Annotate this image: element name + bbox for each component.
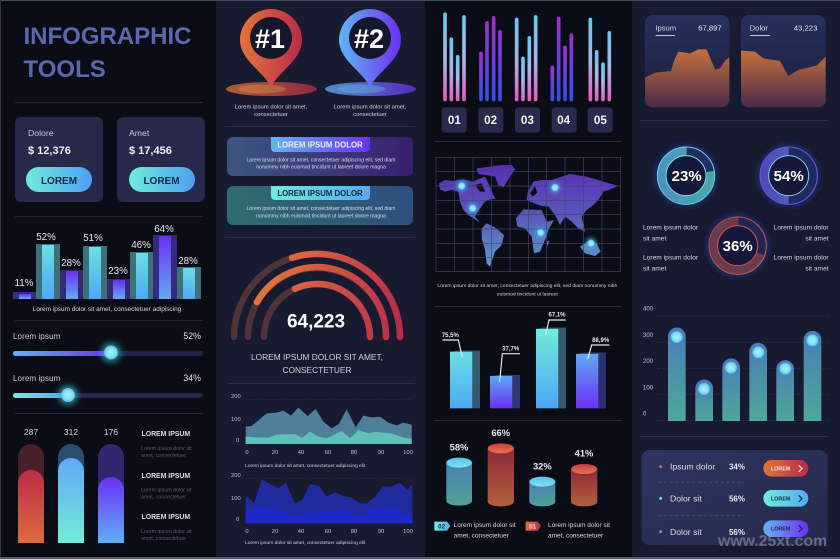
pill bars legend <box>141 431 192 542</box>
area chart: blue: 200 <box>231 473 241 479</box>
panel: Dolore card <box>15 117 103 202</box>
panel: lorem ipsum dolor box 2: nonummy nibh euismod tincidunt ut laoreet dolore magna <box>256 214 386 220</box>
row: Dolor sit 1: Dolor sit <box>670 494 702 504</box>
row: Dolor sit 2 <box>659 520 808 537</box>
pin #1 caption <box>235 104 308 118</box>
thin bar groups 01-05 <box>443 12 611 101</box>
panel: status list <box>642 450 828 545</box>
cylinder legend: 02 <box>438 523 446 530</box>
blue chart caption: Lorem ipsum dolor sit amet, consectetuer adipiscing elit <box>245 540 366 546</box>
area chart: blue: 60 <box>325 529 331 535</box>
3D bar chart: 75,5% <box>442 333 459 339</box>
panel: lorem ipsum dolor box 1 <box>227 137 413 176</box>
gauge caption: CONSECTETUER <box>282 365 352 375</box>
panel: lorem ipsum dolor box 2 <box>227 186 413 225</box>
bar chart: rounded bars with knobs: 400 <box>643 307 654 313</box>
column 3 drawn in zoomed coordinates <box>436 12 621 297</box>
number tiles 01-05: 02 <box>484 114 498 127</box>
cylinder legend: Lorem ipsum dolor sit <box>548 522 610 529</box>
donut: 54% <box>757 144 821 208</box>
cylinder chart: 66% <box>491 428 511 438</box>
pin #1 caption: consectetuer <box>254 112 288 118</box>
panel: Amet card <box>117 117 205 202</box>
bar chart: percentages <box>13 224 201 299</box>
area chart: teal <box>231 394 413 456</box>
cylinder chart: 58% <box>450 442 469 452</box>
watermark: www.25xt.com <box>717 533 827 550</box>
area chart: blue: 20 <box>272 529 278 535</box>
bar chart: percentages: 46% <box>131 240 151 251</box>
title: TOOLS <box>24 56 106 83</box>
panel: lorem ipsum dolor box 1: nonummy nibh euismod tincidunt ut laoreet dolore magna <box>256 164 386 170</box>
row: Ipsum dolor: 34% <box>729 463 745 472</box>
area chart: teal: 100 <box>403 450 413 456</box>
donut labels left: Lorem ipsum dolor <box>643 225 699 232</box>
panel: Ipsum area card <box>645 15 729 107</box>
panel: Dolore card: Dolore <box>28 128 54 138</box>
slider: 52%: 52% <box>183 331 201 341</box>
slider: 52%: Lorem ipsum <box>13 332 61 341</box>
cylinder chart: 41% <box>575 449 594 459</box>
row: Ipsum dolor: LOREM <box>771 466 791 472</box>
area chart: teal: 100 <box>231 417 241 423</box>
donut labels right: Lorem ipsum dolor <box>774 255 829 262</box>
donut: 36%: 36% <box>723 238 753 255</box>
map caption <box>437 283 617 297</box>
bar chart: percentages: 64% <box>154 224 174 235</box>
pill bars legend: amet, consectetuer <box>141 536 186 542</box>
title <box>24 23 192 83</box>
row: Ipsum dolor: Ipsum dolor <box>670 462 715 472</box>
bar chart: rounded bars with knobs: 100 <box>643 385 654 391</box>
bar chart: rounded bars with knobs <box>643 307 830 421</box>
pill bars legend: LOREM IPSUM <box>142 514 190 521</box>
area chart: blue: 40 <box>298 529 304 535</box>
row: Dolor sit 1 <box>659 490 808 507</box>
donut: 36% <box>706 214 770 278</box>
donut: 23%: 23% <box>672 168 702 185</box>
panel: Dolore card: $ 12,376 <box>28 145 71 157</box>
bar chart: percentages: 23% <box>108 266 128 277</box>
area chart: teal: 0 <box>245 450 249 456</box>
3D bar chart: 88,9% <box>592 338 610 344</box>
pill bars legend: amet, consectetuer <box>141 494 186 500</box>
donut: 54%: 54% <box>774 168 804 185</box>
panel: lorem ipsum dolor box 2: Lorem ipsum dolor sit amet, consectetuer adipiscing elit, sed diam <box>247 206 395 212</box>
cylinder legend: amet, consectetuer <box>454 533 510 540</box>
donut labels left: Lorem ipsum dolor <box>643 255 699 262</box>
slider: 52% <box>13 331 203 362</box>
area chart: teal: 60 <box>325 450 331 456</box>
bar chart: percentages: 51% <box>83 233 103 244</box>
3D bar chart <box>442 313 610 408</box>
gauge caption <box>251 352 383 375</box>
pin #2 caption: Lorem ipsum dolor sit amet, <box>334 104 407 110</box>
pin #2 caption <box>334 104 407 118</box>
pill bars legend: LOREM IPSUM <box>142 473 190 480</box>
pill bars: 287 312 176: 312 <box>64 427 78 437</box>
area chart: blue <box>231 473 413 535</box>
pill bars legend: Lorem ipsum dolor sit <box>141 529 192 535</box>
pill bars: 287 312 176: 176 <box>104 427 118 437</box>
pill bars legend: Lorem ipsum dolor sit <box>141 446 192 452</box>
donut labels right <box>774 225 829 273</box>
icon: map pin #1: #1 <box>255 24 285 54</box>
area chart: blue: 100 <box>403 529 413 535</box>
panel: Amet card: LOREM <box>143 176 180 187</box>
panel: Dolor area card <box>741 15 826 107</box>
cylinder chart: 32% <box>533 461 552 471</box>
row: Ipsum dolor <box>659 460 808 477</box>
3D bar chart: 67,1% <box>549 313 566 319</box>
pill bars legend: Lorem ipsum dolor sit <box>141 488 192 494</box>
bar chart: percentages: 28% <box>61 258 81 269</box>
panel: Dolor area card: 43,223 <box>794 24 817 33</box>
row: Dolor sit 1: LOREM <box>771 496 791 502</box>
area chart: blue: 90 <box>378 529 384 535</box>
cylinder legend: 01 <box>529 523 537 530</box>
number tiles 01-05: 04 <box>557 114 571 127</box>
area chart: teal: 20 <box>272 450 278 456</box>
pin #2 caption: consectetuer <box>353 112 387 118</box>
area chart: teal: 40 <box>298 450 304 456</box>
area chart: blue: 0 <box>245 529 249 535</box>
donut: 23% <box>654 144 718 208</box>
row: Dolor sit 2: Dolor sit <box>670 527 702 537</box>
donut labels left <box>643 225 699 273</box>
area chart: blue: 80 <box>351 529 357 535</box>
icon: map pin #2 <box>325 9 416 96</box>
pill bars: 287 312 176: 287 <box>24 427 38 437</box>
bar chart: percentages: 11% <box>15 278 34 289</box>
gauge value: 64,223 <box>287 312 345 332</box>
donut labels left: sit amet <box>643 266 666 273</box>
slider: 34%: Lorem ipsum <box>13 374 61 383</box>
number tiles 01-05: 05 <box>594 114 607 127</box>
pill bars legend: LOREM IPSUM <box>142 431 190 438</box>
panel: lorem ipsum dolor box 2: LOREM IPSUM DOLOR <box>277 189 363 198</box>
3D bar chart: 37,7% <box>502 346 520 352</box>
bar chart: rounded bars with knobs: 300 <box>643 333 654 339</box>
area chart: blue: 0 <box>236 517 239 523</box>
bar chart: rounded bars with knobs: 200 <box>643 359 654 365</box>
gauge caption: LOREM IPSUM DOLOR SIT AMET, <box>251 352 383 362</box>
panel: Dolore card: LOREM <box>41 176 77 187</box>
gauge: concentric arcs <box>234 254 400 337</box>
bar chart: percentages: 28% <box>178 256 198 267</box>
donut labels right: sit amet <box>805 266 829 273</box>
world map with grid <box>436 157 621 272</box>
icon: map pin #1 <box>226 9 317 96</box>
number tiles 01-05: 01 <box>448 114 461 127</box>
panel: Ipsum area card: 67,897 <box>698 24 722 33</box>
donut labels right: sit amet <box>805 236 829 243</box>
number tiles 01-05: 03 <box>521 114 534 127</box>
number tiles 01-05 <box>442 107 613 133</box>
area chart: teal: 0 <box>236 438 239 444</box>
bar chart caption: Lorem ipsum dolor sit amet, consectetuer adipiscing <box>33 306 182 313</box>
panel: Dolor area card: Dolor <box>750 24 768 33</box>
row: Dolor sit 2: LOREM <box>771 526 791 532</box>
bar chart: rounded bars with knobs: 0 <box>643 412 647 418</box>
slider: 34%: 34% <box>183 373 201 383</box>
panel: Amet card: $ 17,456 <box>129 145 172 157</box>
donut labels left: sit amet <box>643 236 666 243</box>
title: INFOGRAPHIC <box>24 23 192 50</box>
row: Dolor sit 2: 56% <box>729 528 745 537</box>
panel: lorem ipsum dolor box 1: LOREM IPSUM DOLOR <box>277 140 363 150</box>
pill bars: 287 312 176 <box>18 427 124 543</box>
slider: 34% <box>13 373 203 405</box>
pill bars legend: amet, consectetuer <box>141 453 186 459</box>
pin #1 caption: Lorem ipsum dolor sit amet, <box>235 104 308 110</box>
area chart: blue: 100 <box>231 496 241 502</box>
panel: lorem ipsum dolor box 1: Lorem ipsum dolor sit amet, consectetuer adipiscing elit, sed diam <box>247 158 395 164</box>
icon: map pin #2: #2 <box>354 24 384 54</box>
bar chart: percentages: 52% <box>36 232 56 243</box>
panel: Amet card: Amet <box>129 128 150 138</box>
map caption: euismod tincidunt ut laoreet <box>497 291 558 297</box>
cylinder legend: amet, consectetuer <box>548 533 604 540</box>
area chart: teal: 90 <box>378 450 384 456</box>
teal chart caption: Lorem ipsum dolor sit amet, consectetuer adipiscing elit <box>245 463 366 469</box>
cylinder chart <box>446 428 597 506</box>
donut labels right: Lorem ipsum dolor <box>774 225 829 232</box>
row: Dolor sit 1: 56% <box>729 495 745 504</box>
panel: Ipsum area card: Ipsum <box>655 24 676 33</box>
cylinder legend: Lorem ipsum dolor sit <box>454 522 516 529</box>
area chart: teal: 200 <box>231 394 241 400</box>
area chart: teal: 80 <box>351 450 357 456</box>
cylinder legend <box>434 522 610 540</box>
map caption: Lorem ipsum dolor sit amet, consectetuer adipiscing elit, sed diam nonummy nibh <box>437 283 617 289</box>
